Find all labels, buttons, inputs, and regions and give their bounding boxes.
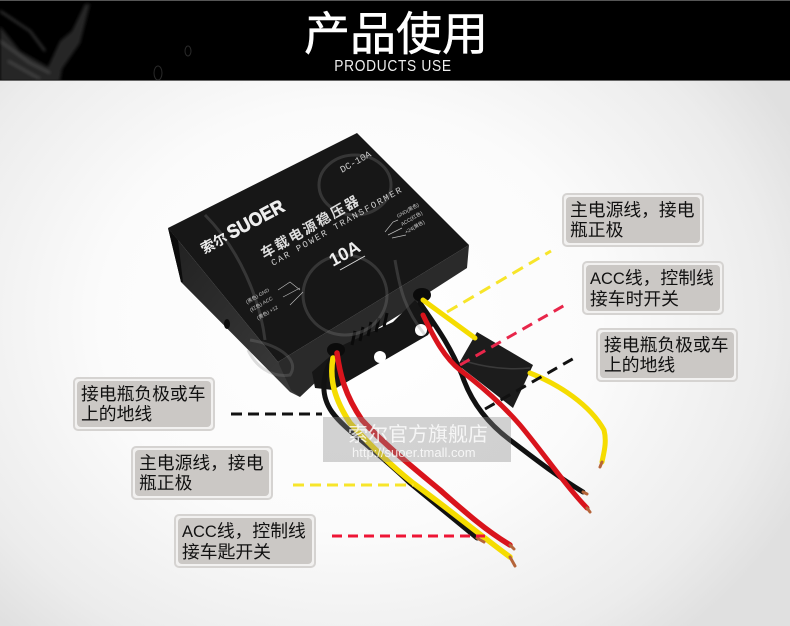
callout: main power right bbox=[562, 193, 704, 247]
top face bbox=[168, 133, 469, 362]
device logo: SUOER bbox=[224, 196, 288, 244]
watermark: 索尔官方旗舰店 bbox=[348, 423, 488, 446]
title: 产品使用 bbox=[304, 8, 488, 60]
callout: main power right: 瓶正极 bbox=[570, 220, 623, 240]
right wire tips bbox=[583, 462, 602, 512]
right red wire bbox=[423, 315, 587, 508]
callout: ground left: 上的地线 bbox=[81, 404, 152, 424]
left yellow wire bbox=[332, 358, 510, 557]
watermark bbox=[323, 417, 511, 462]
device body bbox=[168, 133, 469, 397]
callout: ground left bbox=[73, 377, 215, 431]
callout: ground left: 接电瓶负极或车 bbox=[81, 384, 205, 404]
callout: main power right: 主电源线，接电 bbox=[570, 200, 694, 220]
grommets bbox=[327, 343, 345, 357]
device output wiring legend: (红色) ACC bbox=[249, 295, 274, 314]
callout: main power left: 主电源线，接电 bbox=[139, 453, 263, 473]
callout: main power left bbox=[131, 446, 273, 500]
watermark: http://suoer.tmall.com bbox=[352, 445, 476, 460]
callout: ACC left bbox=[174, 514, 316, 568]
left wires bbox=[324, 353, 515, 566]
device rating: 10A bbox=[326, 236, 364, 271]
callout: main power left: 瓶正极 bbox=[139, 473, 192, 493]
left red wire bbox=[337, 353, 510, 545]
callout: ACC left: 接车匙开关 bbox=[182, 542, 271, 562]
device output wiring legend: (黑色) GND bbox=[245, 286, 271, 306]
vents bbox=[352, 313, 387, 345]
header band bbox=[0, 0, 790, 81]
dashed leader: red left bbox=[332, 534, 485, 538]
device input wiring legend: +24(黄色) bbox=[404, 218, 426, 236]
relay block bbox=[458, 332, 533, 408]
right yellow wire out bbox=[530, 373, 605, 462]
device logo bbox=[196, 196, 288, 258]
device english name: CAR POWER TRANSFORMER bbox=[270, 185, 405, 269]
dashed leader: yellow upper bbox=[447, 251, 551, 312]
callout: ACC left: ACC线，控制线 bbox=[182, 521, 306, 541]
dashed leader: red upper bbox=[460, 305, 565, 365]
dashed leader: yellow left bbox=[293, 484, 414, 486]
right wires bbox=[420, 300, 605, 512]
callout: ACC right: ACC线，控制线 bbox=[590, 268, 714, 288]
mounting flange bbox=[312, 300, 435, 390]
left wire tips bbox=[477, 538, 515, 566]
callout: ACC right bbox=[582, 261, 724, 315]
subtitle: PRODUCTS USE bbox=[334, 58, 452, 75]
device logo: 索尔 bbox=[198, 229, 230, 257]
device input wiring legend bbox=[385, 201, 426, 238]
right black wire bbox=[420, 303, 583, 492]
device output wiring legend: (黄色) +12 bbox=[256, 304, 279, 322]
right yellow wire in bbox=[423, 300, 475, 338]
dashed leader: black right bbox=[485, 357, 576, 409]
left wall bbox=[168, 228, 300, 397]
callout: ACC right: 接车时开关 bbox=[590, 289, 679, 309]
smoke swirls bbox=[205, 155, 425, 375]
device input wiring legend: ACC(红色) bbox=[400, 209, 424, 228]
callout: ground right: 上的地线 bbox=[604, 355, 675, 375]
dashed leader: black left bbox=[231, 412, 322, 416]
front wall bbox=[278, 245, 469, 397]
callout: ground right bbox=[596, 328, 738, 382]
device product name: 车载电源稳压器 bbox=[258, 191, 363, 262]
header smoke texture bbox=[0, 3, 192, 80]
device input wiring legend: GND(黑色) bbox=[396, 201, 420, 220]
device output wiring legend bbox=[245, 282, 303, 322]
callout: ground right: 接电瓶负极或车 bbox=[604, 335, 728, 355]
left black wire bbox=[324, 357, 477, 538]
device model: DC-10A bbox=[338, 149, 373, 176]
